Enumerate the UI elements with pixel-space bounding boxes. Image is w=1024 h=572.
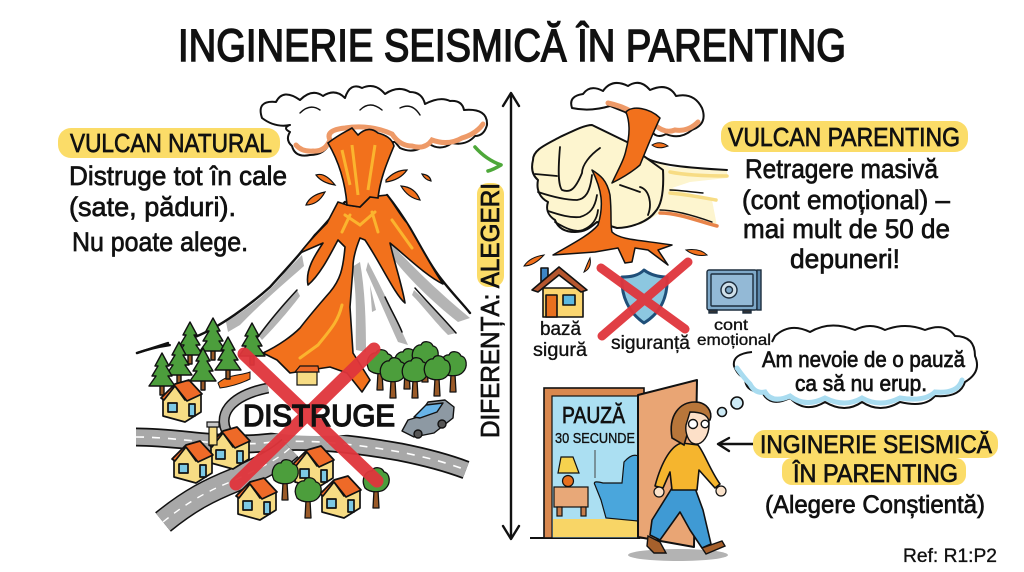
lava upper crack [612,108,660,183]
icon labels: bază [540,319,581,340]
shoes [647,536,725,554]
room floor [553,519,638,537]
grey shading [226,243,470,352]
text block: parenting description: mai mult de 50 de [743,214,950,244]
hands [654,486,726,497]
column highlights [342,145,375,195]
text block: parenting description [742,154,950,274]
icon labels: cont [714,317,749,334]
heading line two: ÎN PARENTING [792,459,958,488]
icon: green check [475,147,501,171]
reference note: Ref: R1:P2 [903,546,997,567]
lower trees [272,460,389,518]
stray hill line [137,343,168,353]
icon labels: emoțional [697,332,771,349]
icon labels [533,317,771,361]
subheading: (Alegere Conștientă) [765,491,985,519]
duration text: 30 SECUNDE [555,431,635,447]
red cross over shield [601,262,688,336]
armchair [594,455,638,521]
fist [532,125,663,232]
room [552,396,639,538]
panel: vulcan natural text [58,128,287,257]
eyes [688,420,709,428]
title: INGINERIE SEISMICĂ ÎN PARENTING [178,20,846,71]
illustration: volcano scene [136,86,487,522]
label: distruge: DISTRUGE [243,398,395,433]
highlight: vulcan parenting [721,121,968,152]
label halo [233,394,403,436]
illustration: fist holding volcano [524,83,727,272]
highlight: line two [782,458,966,485]
person walking [628,402,728,561]
hair [671,402,711,445]
lava flow [263,195,443,392]
highlight: vulcan natural [58,128,280,158]
heading line one: INGINERIE SEISMICĂ [760,430,992,459]
lava splashes [524,143,707,272]
axis label: diferența alegeri [475,147,505,438]
highlight: alegeri [477,183,504,287]
window line [594,450,596,478]
car [402,400,454,438]
door frame [544,388,644,538]
thought text: Am nevoie de o pauză [762,347,966,372]
face [686,412,709,444]
arm lines [645,157,727,226]
icon labels: sigură [533,340,587,361]
cloud [261,86,487,156]
text block: parenting description: (cont emoțional) – [742,185,950,215]
heading: vulcan parenting: VULCAN PARENTING [728,122,960,152]
arm [610,157,727,226]
text block: natural description: Nu poate alege. [72,227,248,257]
round trees [367,342,466,398]
arrow to person [718,438,753,451]
rotated label: DIFERENȚA: ALEGERI [475,183,505,438]
thought text [762,347,966,396]
doorway [530,380,697,547]
shadow [628,549,728,561]
pause text: PAUZĂ [562,402,626,428]
floor line [530,537,640,539]
text block: parenting description: depuneri! [790,244,900,274]
torso and arms [655,443,720,490]
red cross [236,349,377,484]
lava splashes [306,170,431,205]
panel: conscious choice text [753,430,998,519]
text block: parenting description: Retragere masivă [745,154,939,184]
cloud [571,83,704,136]
heading: vulcan natural: VULCAN NATURAL [70,128,272,158]
finger lines [535,147,650,231]
highlight: line one [753,430,998,458]
door leaf [638,380,697,547]
houses [161,366,361,520]
text block: natural description [69,161,287,257]
axis: vertical arrow [503,93,519,539]
text block: natural description: Distruge tot în cale [69,161,287,191]
thought bubble [718,325,977,416]
pine trees [149,318,265,395]
lava lower stem [553,170,672,265]
lava stream small [218,372,250,388]
lamp and table [554,457,588,516]
text block: natural description: (sate, păduri). [69,192,236,222]
eruption column [328,128,394,207]
icon labels: siguranță [611,333,690,354]
mountain [137,195,470,353]
icon: emotional safe [707,270,761,313]
roads [136,388,466,522]
icon: safety shield [622,270,667,323]
thought text: ca să nu erup. [795,371,927,396]
legs [650,488,711,548]
icon: house, secure base [532,267,587,317]
lava highlights [300,212,412,358]
panel: vulcan parenting text [721,121,968,274]
